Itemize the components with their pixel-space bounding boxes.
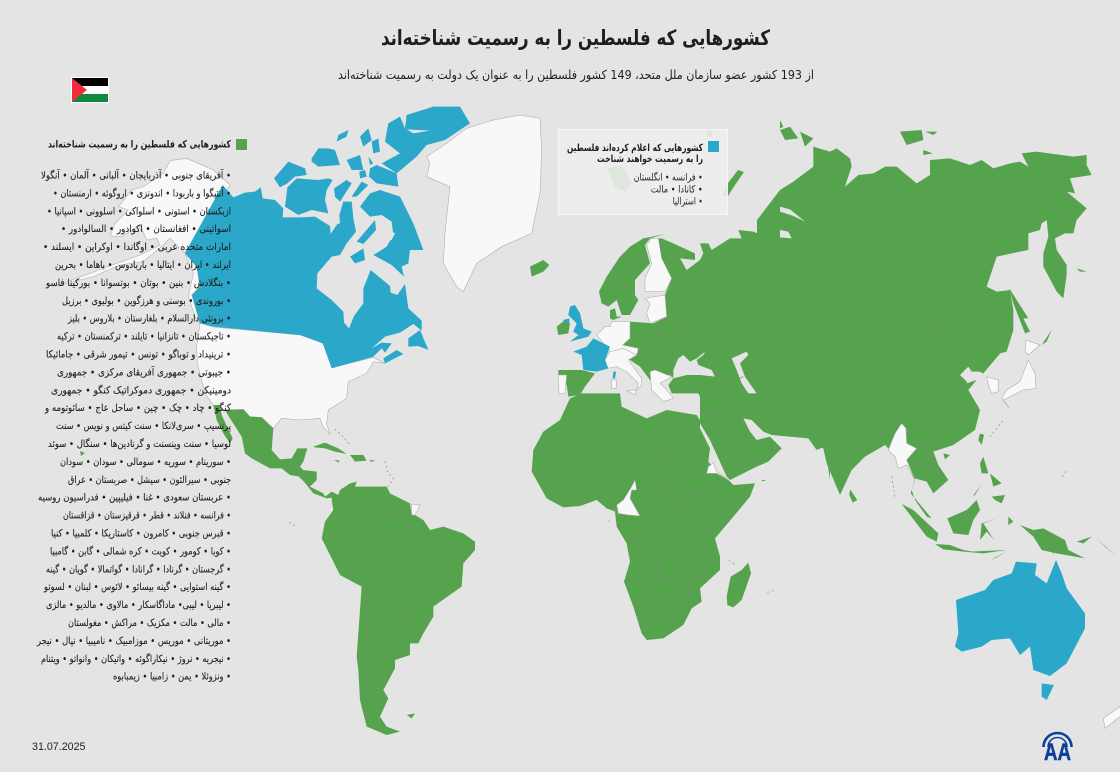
- list: recognising countries: • آنتیگوا و باربودا • اندونزی • اروگوئه • ارمنستان •: [53, 186, 231, 199]
- list: recognising countries: دومینیکن • جمهوری دموکراتیک کنگو • جمهوری: [51, 384, 231, 396]
- list: recognising countries: ازبکستان • استونی • اسلواکی • اسلوونی • اسپانیا •: [47, 206, 231, 217]
- list: recognising countries: • بوروندی • بوسنی و هرزگوین • بولیوی • برزیل: [62, 295, 231, 307]
- legend: announced heading: [567, 143, 703, 165]
- map: Greenland: [427, 115, 542, 292]
- legend: announced heading: را به رسمیت خواهند شناخت: [597, 154, 703, 165]
- list: recognising countries: • آفریقای جنوبی • آذربایجان • آلبانی • آلمان • آنگولا: [41, 168, 231, 182]
- title: کشورهایی که فلسطین را به رسمیت شناخته‌اند: [381, 26, 771, 50]
- list: recognising countries: امارات متحده عربی • اوگاندا • اوکراین • ایسلند •: [43, 241, 231, 253]
- list: recognising countries: جنوبی • سیرالئون • سیشل • صربستان • عراق: [68, 475, 231, 486]
- map: Europe, Russia and Middle East: [557, 220, 830, 480]
- map: Novaya Zemlya: [722, 170, 744, 196]
- list: recognising countries: پرنسیپ • سری‌لانکا • سنت کیتس و نویس • سنت: [56, 421, 231, 432]
- list: recognising countries: • برونئی دارالسلام • بلغارستان • بلاروس • بلیز: [67, 314, 231, 325]
- map: Alaska: [53, 158, 230, 323]
- list: recognising countries: • مالی • مالت • مکزیک • مراکش • مغولستان: [68, 618, 231, 629]
- list: recognising countries: • گرجستان • گرنادا • گرانادا • گواتمالا • گویان • گینه: [46, 563, 231, 575]
- map: Iceland: [530, 260, 549, 277]
- legend: recognised swatch: [236, 139, 247, 150]
- list: recognising countries: • عربستان سعودی • غنا • فیلیپین • فدراسیون روسیه: [38, 493, 231, 504]
- map: Canada: [185, 107, 470, 368]
- subtitle: از 193 کشور عضو سازمان ملل متحد، 149 کشور فلسطین را به عنوان یک دولت به رسمیت شناخته‌اند: [338, 67, 814, 83]
- legend: announced countries: • فرانسه • انگلستان: [634, 171, 703, 183]
- list: recognising countries: لوسیا • سنت وینسنت و گرنادین‌ها • سنگال • سوئد: [48, 438, 231, 450]
- legend: announced heading: کشورهایی که اعلام کرده‌اند فلسطین: [567, 143, 703, 154]
- icon: AA logo: [1044, 733, 1072, 766]
- list: recognising countries: • بنگلادش • بنین • بوتان • بوتسوانا • بورکینا فاسو: [45, 277, 231, 289]
- map: United Kingdom and France: [563, 305, 616, 378]
- map: Svalbard: [608, 130, 713, 192]
- map: connection of north Russia: [757, 190, 782, 262]
- icon: AA logo: AA: [1044, 739, 1071, 766]
- list: recognising countries: • لیبریا • لیبی• ماداگاسکار • مالاوی • مالدیو • مالزی: [46, 599, 231, 611]
- legend: announced countries: • استرالیا: [673, 196, 703, 207]
- legend: announced countries: • کانادا • مالت: [651, 184, 703, 195]
- map: Mexico and Central America: [213, 405, 393, 526]
- legend: announced swatch: [708, 141, 719, 152]
- list: recognising countries: اسواتینی • افغانستان • اکوادور • السالوادور •: [61, 224, 231, 235]
- list: recognising countries: • موریتانی • موریس • موزامبیک • نامیبیا • نپال • نیجر: [36, 636, 231, 647]
- list: recognising countries: • جیبوتی • جمهوری آفریقای مرکزی • جمهوری: [57, 365, 231, 378]
- list: recognising countries: کنگو • چاد • چک • چین • ساحل عاج • سائوتومه و: [44, 402, 231, 414]
- legend: announced countries: [634, 171, 703, 207]
- list: recognising countries: ایرلند • ایران • ایتالیا • باربادوس • باهاما • بحرین: [55, 260, 231, 271]
- icon: Palestine flag: [71, 77, 109, 103]
- list: recognising countries: • تاجیکستان • تانزانیا • تایلند • ترکمنستان • ترکیه: [57, 332, 231, 343]
- list: recognising countries: • نیجریه • نروژ • نیکاراگوئه • واتیکان • وانواتو • ویتنام: [41, 653, 231, 665]
- map: United States: [197, 323, 385, 435]
- list: recognising countries: • ونزوئلا • یمن • زامبیا • زیمبابوه: [113, 672, 231, 683]
- map: New Zealand: [1103, 705, 1120, 728]
- list: recognising countries: • گینه استوایی • گینه بیسائو • لائوس • لبنان • لسوتو: [43, 581, 231, 593]
- legend box: countries that will recognise: [558, 130, 728, 214]
- legend: recognised heading: کشورهایی که فلسطین را به رسمیت شناخته‌اند: [48, 140, 231, 150]
- list: recognising countries: • فرانسه • فنلاند • قطر • قرقیزستان • قزاقستان: [63, 511, 231, 522]
- list: recognising countries: • کوبا • کومور • کویت • کره شمالی • گابن • گامبیا: [50, 545, 231, 557]
- map: South America: [322, 482, 475, 735]
- list: recognising countries: • قبرس جنوبی • کامرون • کاستاریکا • کلمبیا • کنیا: [51, 528, 231, 540]
- list: recognising countries: • سورینام • سوریه • سومالی • سودان • سودان: [60, 457, 231, 468]
- map: East and Southeast Asia: [820, 340, 1117, 560]
- date: 31.07.2025: [32, 741, 86, 753]
- map: Hawaii: [80, 451, 85, 456]
- map: Africa: [532, 393, 775, 640]
- map: Australia: [955, 560, 1085, 700]
- map: Siberia and Far East: [780, 120, 1092, 410]
- list: recognising countries: • ترینیداد و توباگو • تونس • تیمور شرقی • جامائیکا: [46, 348, 231, 360]
- list: recognising countries: [36, 168, 231, 683]
